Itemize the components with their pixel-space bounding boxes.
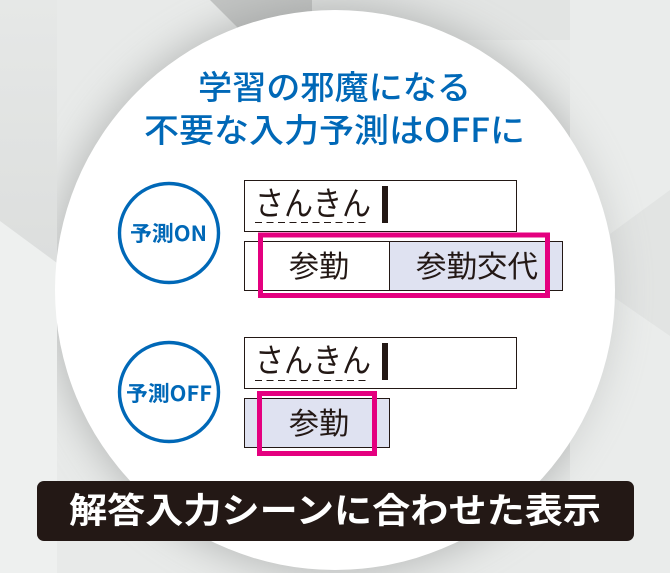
suggestion bar: prediction on: 参勤 bbox=[289, 242, 349, 286]
title bbox=[144, 61, 525, 152]
highlight frame: two suggestions bbox=[260, 235, 548, 296]
input field: prediction off: さんきん bbox=[255, 334, 371, 382]
input field: prediction on bbox=[244, 177, 516, 232]
suggestion bar: prediction off bbox=[244, 398, 390, 448]
title: 不要な入力予測はOFFに bbox=[144, 104, 525, 152]
suggestion bar: prediction on: 参勤交代 bbox=[416, 242, 538, 286]
badge: prediction on bbox=[120, 184, 218, 282]
suggestion bar: prediction on bbox=[244, 242, 562, 290]
badge: prediction off bbox=[120, 342, 218, 442]
highlight frame: single suggestion bbox=[260, 394, 374, 454]
title: 学習の邪魔になる bbox=[198, 61, 471, 109]
input field: prediction on: さんきん bbox=[255, 177, 371, 225]
input field: prediction off bbox=[244, 334, 516, 388]
caption bar: 解答入力シーンに合わせた表示 bbox=[69, 483, 601, 534]
suggestion bar: prediction off: 参勤 bbox=[289, 399, 349, 443]
badge: prediction off: 予測OFF bbox=[126, 378, 212, 408]
caption bar bbox=[37, 481, 634, 541]
badge: prediction on: 予測ON bbox=[130, 218, 207, 248]
